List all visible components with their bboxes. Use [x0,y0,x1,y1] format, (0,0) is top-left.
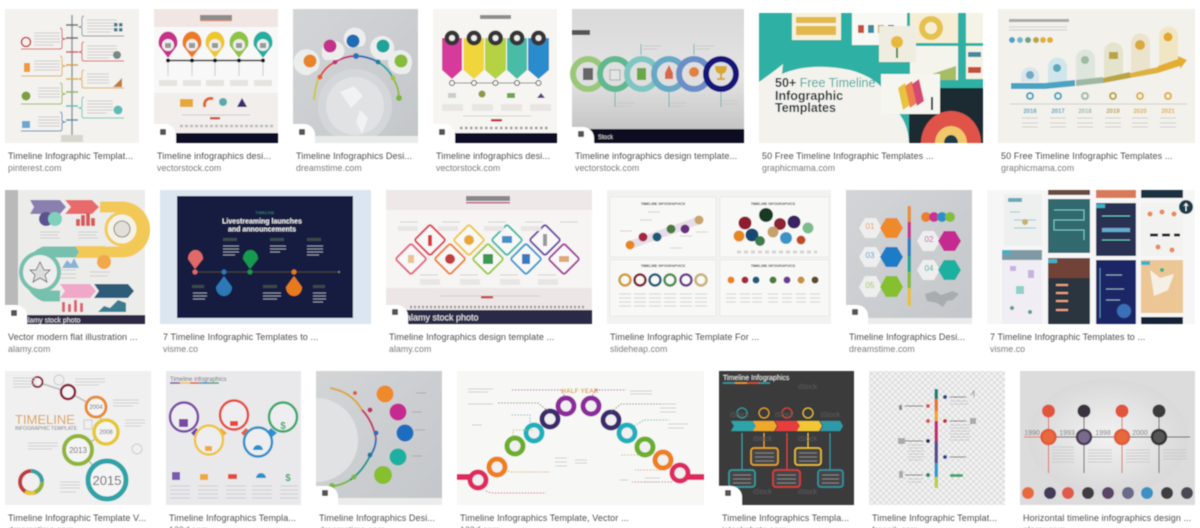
thumbnail: hexagon timeline: 04 [925,264,934,273]
title: Timeline Infographic Template V... [8,513,146,523]
source: dreamstime.com [296,163,362,173]
thumbnail: horizontal timeline with numbered circles [1020,371,1195,505]
card: slideheap four slides [607,190,831,354]
thumbnail: dark timeline with chevrons: iStock [753,489,773,496]
card: vectorstock color columns [433,9,557,173]
source: vectorstock.com [575,163,639,173]
thumbnail: horizontal timeline with numbered circles: 1993 [1059,430,1075,437]
title: Timeline Infographics Desi... [849,332,965,342]
title: Timeline Infographics design template ... [389,332,554,342]
title: Timeline infographics desi... [157,151,271,161]
title: Timeline Infographic Templat... [872,513,997,523]
thumbnail: dark timeline with chevrons: iStock [798,384,818,391]
title: 50 Free Timeline Infographic Templates ... [1001,151,1173,161]
thumbnail: dark timeline with chevrons: iStock [775,412,795,419]
thumbnail: 50+ free timeline templates collage: Templates [775,101,836,115]
title: Timeline Infographics Desi... [296,151,412,161]
card: 123rf half year staircase [457,371,704,528]
thumbnail: livestreaming launches dark poster [160,190,371,324]
thumbnail: collage of timeline posters [987,190,1195,324]
thumbnail: half year bead staircase [457,371,704,505]
thumbnail: four timeline slides: TIMELINE INFOGRAPHICS [751,264,796,268]
title: Timeline infographics design template... [575,151,737,161]
thumbnail: six arches over rising arrow [998,9,1195,143]
source: alamy.com [389,344,431,354]
title: 7 Timeline Infographic Templates to ... [990,332,1145,342]
title: Timeline Infographics Templa... [722,513,849,523]
source: dreamstime.com [849,344,915,354]
thumbnail: hexagon timeline: 05 [866,281,875,290]
card: alamy diamonds [386,190,592,354]
thumbnail: colored arch over globe [293,9,418,143]
card: vectorstock rings [572,9,744,173]
card: horizontal timeline [1020,371,1195,528]
thumbnail: vertical timeline with bracket callouts [5,9,139,143]
thumbnail: six arches over rising arrow: 2021 [1161,109,1175,115]
card: 123rf circles chain [166,371,301,528]
card: graphicmama 50 free [759,13,983,173]
source: vectorstock.com [157,163,221,173]
card: graphicmama rising ribbon [998,9,1195,173]
thumbnail: five location pins on a line [154,9,278,143]
title: Horizontal timeline infographics design ... [1023,513,1191,523]
title: Timeline Infographic Templat... [8,151,133,161]
source: graphicmama.com [762,163,835,173]
thumbnail: horizontal timeline with numbered circles: 1998 [1095,430,1111,437]
card: vectorstock pins [154,9,278,173]
thumbnail: colored diamond timeline: alamy stock photo [406,312,479,322]
card: istock dark chevrons [719,371,854,528]
thumbnail: 50+ free timeline templates collage: Infographic [775,89,843,103]
thumbnail: growing circle timeline: 2013 [69,446,87,455]
thumbnail: winding arrow path: alamy stock photo [24,318,81,324]
thumbnail: six arches over rising arrow: 2017 [1051,109,1065,115]
card: visme livestreaming [160,190,371,354]
source: visme.co [990,344,1025,354]
thumbnail: hexagon timeline [846,190,972,324]
thumbnail: colored circle chain with icons: $ [285,473,291,484]
title: Timeline infographics desi... [436,151,550,161]
source: pinterest.com [8,163,61,173]
thumbnail: dark timeline with chevrons: Timeline Infographics [723,375,790,382]
thumbnail: horizontal timeline with numbered circles: 1990 [1024,430,1040,437]
thumbnail: linked rings timeline [572,9,744,143]
source: vectorstock.com [436,163,500,173]
thumbnail: growing circle timeline: TIMELINE [15,412,75,427]
card: transparent vertical timeline [869,371,1005,528]
card: circles timeline 2015 [5,371,151,528]
thumbnail: livestreaming launches dark poster: TIMELINE [255,211,275,215]
thumbnail: half year bead staircase: HALF YEAR [562,389,599,395]
thumbnail: horizontal timeline with numbered circles: 2000 [1132,430,1148,437]
thumbnail: livestreaming launches dark poster: Livestreaming launches [222,218,302,226]
card: alamy winding path [5,190,145,354]
thumbnail: vertical bar on checker background [869,371,1005,505]
thumbnail: growing circle timeline: 2015 [93,473,121,488]
thumbnail: six arches over rising arrow: 2019 [1106,109,1120,115]
thumbnail: dark timeline with chevrons: iStock [821,412,841,419]
thumbnail: colored circle chain with icons [166,371,301,505]
thumbnail: linked rings timeline: Stock [598,135,614,141]
thumbnail: hexagon timeline: 03 [866,251,875,260]
title: Timeline Infographic Template For ... [610,332,759,342]
card: pinterest vertical timeline [5,9,139,173]
card: dreamstime arch [293,9,418,173]
card: dreamstime half globe [316,371,442,528]
thumbnail: growing circle timeline: INFOGRAPHIC TEMPLATE [15,426,78,432]
thumbnail: four timeline slides: TIMELINE INFOGRAPHICS [751,202,796,206]
title: Vector modern flat illustration ... [8,332,138,342]
thumbnail: four timeline slides: TIMELINE INFOGRAPHICS [641,264,686,268]
thumbnail: hexagon timeline: 01 [866,222,875,231]
thumbnail: 50+ free timeline templates collage: 50+ Free Timeline [775,76,875,90]
title: Timeline Infographics Desi... [319,513,435,523]
card: dreamstime hexagons [846,190,972,354]
thumbnail: dark timeline with chevrons: iStock [753,436,773,443]
thumbnail: four timeline slides: TIMELINE INFOGRAPHICS [641,202,686,206]
thumbnail: livestreaming launches dark poster: and announcements [228,226,296,234]
thumbnail: dark timeline with chevrons [719,371,854,505]
source: graphicmama.com [1001,163,1074,173]
thumbnail: six arches over rising arrow: 2016 [1023,109,1037,115]
title: Timeline Infographics Template, Vector ... [460,513,629,523]
thumbnail: dark timeline with chevrons: iStock [798,436,818,443]
source: alamy.com [8,344,50,354]
source: slideheap.com [610,344,667,354]
source: visme.co [163,344,198,354]
thumbnail: 50+ free timeline templates collage [759,13,983,143]
thumbnail: colored circle chain with icons: $ [280,421,286,432]
thumbnail: six arches over rising arrow: 2018 [1078,109,1092,115]
title: Timeline Infographics Templa... [169,513,296,523]
title: 50 Free Timeline Infographic Templates ... [762,151,934,161]
thumbnail: dark timeline with chevrons: iStock [730,412,750,419]
thumbnail: growing circle timeline: 2004 [89,405,103,411]
thumbnail: growing circle timeline: 2008 [99,430,113,436]
thumbnail: colored circle chain with icons: Timeline infographics [170,377,226,383]
thumbnail: winding arrow path [5,190,145,324]
thumbnail: dark timeline with chevrons: iStock [798,489,818,496]
thumbnail: six arches over rising arrow: 2020 [1133,109,1147,115]
thumbnail: growing circle timeline [5,371,151,505]
thumbnail: half arc with balls [316,371,442,505]
thumbnail: hexagon timeline: 02 [925,235,934,244]
thumbnail: colored diamond timeline [386,190,592,324]
thumbnail: four timeline slides [607,190,831,324]
title: 7 Timeline Infographic Templates to ... [163,332,318,342]
card: visme poster collage [987,190,1195,354]
thumbnail: five colored arrow columns [433,9,557,143]
